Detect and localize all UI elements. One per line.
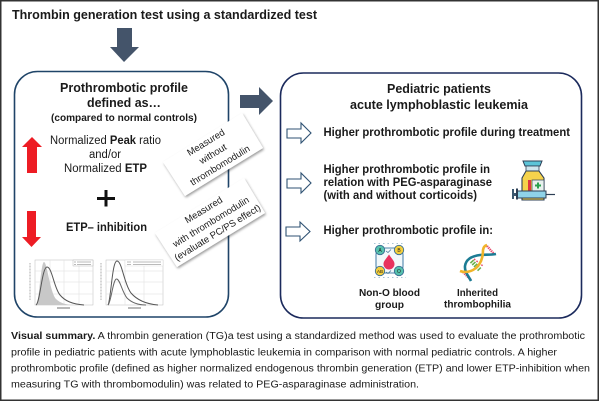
- heading: prothrombotic profile: [51, 80, 197, 124]
- icon: red up arrow: [22, 137, 42, 173]
- text block: visual summary: profile in pediatric patients with acute lymphoblastic leukemia in comparison with normal pediatric controls. A higher: [11, 347, 558, 358]
- heading: pediatric patients: acute lymphoblastic leukemia: [350, 98, 529, 112]
- panel: prothrombotic profile: [14, 72, 228, 317]
- icon: blood groups: [374, 244, 406, 278]
- text block: visual summary: [11, 331, 590, 391]
- heading: pediatric patients: [350, 82, 529, 112]
- text: higher profile in: Higher prothrombotic profile in:: [324, 225, 493, 237]
- icon: vial and syringe: [512, 161, 555, 200]
- text: inherited thrombophilia: [444, 288, 511, 310]
- text: ETP inhibition: ETP– inhibition: [66, 222, 147, 234]
- chart: thrombin generation curves A: [30, 260, 93, 308]
- panel: pediatric patients: [280, 73, 582, 318]
- arrow: outline 3: [286, 222, 310, 241]
- arrow: outline 1: [287, 123, 311, 143]
- icon: blood groups: O: [397, 269, 401, 275]
- callout: measured with thrombomodulin: with thrombomodulin: [170, 195, 252, 251]
- icon: red down arrow: [22, 211, 41, 247]
- icon: blood groups: AB: [377, 269, 383, 274]
- text block: visual summary: prothrombotic profile (defined as higher normalized endogenous thrombin generation (ETP) and lower ETP-inhibition when: [11, 364, 590, 374]
- callout: measured without thrombomodulin: [163, 113, 263, 196]
- arrow: to patients panel: [240, 87, 273, 115]
- text: peak ratio and ETP: and/or: [89, 149, 121, 161]
- callout: measured without thrombomodulin: Measured: [185, 127, 227, 159]
- heading: prothrombotic profile: defined as…: [87, 95, 161, 110]
- text: non-O blood group: group: [375, 300, 404, 311]
- text: PEG-asparaginase: relation with PEG-asparaginase: [324, 177, 492, 189]
- text: peak ratio and ETP: [50, 135, 161, 175]
- callout: measured with thrombomodulin: [155, 178, 265, 267]
- text: during treatment: Higher prothrombotic profile during treatment: [324, 127, 570, 139]
- text: PEG-asparaginase: (with and without corticoids): [324, 190, 477, 202]
- arrow: outline 2: [287, 173, 311, 193]
- text: inherited thrombophilia: Inherited: [457, 288, 498, 299]
- icon: DNA helix: [460, 245, 496, 281]
- text: peak ratio and ETP: Normalized ETP: [64, 163, 147, 175]
- text: inherited thrombophilia: thrombophilia: [444, 300, 511, 310]
- callout: measured with thrombomodulin: Measured: [183, 195, 225, 226]
- callout: measured without thrombomodulin: without: [197, 142, 229, 168]
- title: Thrombin generation test using a standardized test: [12, 8, 318, 22]
- callout: measured without thrombomodulin: thrombomodulin: [188, 143, 252, 188]
- text block: visual summary: Visual summary. A thrombin generation (TG)a test using a standardized method was used to evaluate the prothrombotic: [11, 331, 585, 342]
- icon: plus: [97, 190, 115, 206]
- text: PEG-asparaginase: [324, 164, 492, 202]
- chart: thrombin generation curves B: [101, 260, 163, 308]
- arrow: down to profile panel: [110, 28, 139, 62]
- heading: prothrombotic profile: Prothrombotic profile: [60, 80, 188, 95]
- text block: visual summary: measuring TG with thrombomodulin) was related to PEG-asparaginase administration.: [11, 380, 419, 391]
- icon: blood groups: A: [378, 248, 382, 254]
- text: non-O blood group: Non-O blood: [359, 288, 420, 299]
- heading: pediatric patients: Pediatric patients: [387, 82, 491, 96]
- text: peak ratio and ETP: Normalized Peak ratio: [50, 135, 161, 147]
- heading: prothrombotic profile: (compared to normal controls): [51, 113, 197, 124]
- text: non-O blood group: [359, 288, 420, 311]
- text: PEG-asparaginase: Higher prothrombotic profile in: [324, 164, 490, 176]
- callout: measured with thrombomodulin: (evaluate PC/PS effect): [173, 203, 263, 264]
- icon: blood groups: B: [397, 248, 401, 254]
